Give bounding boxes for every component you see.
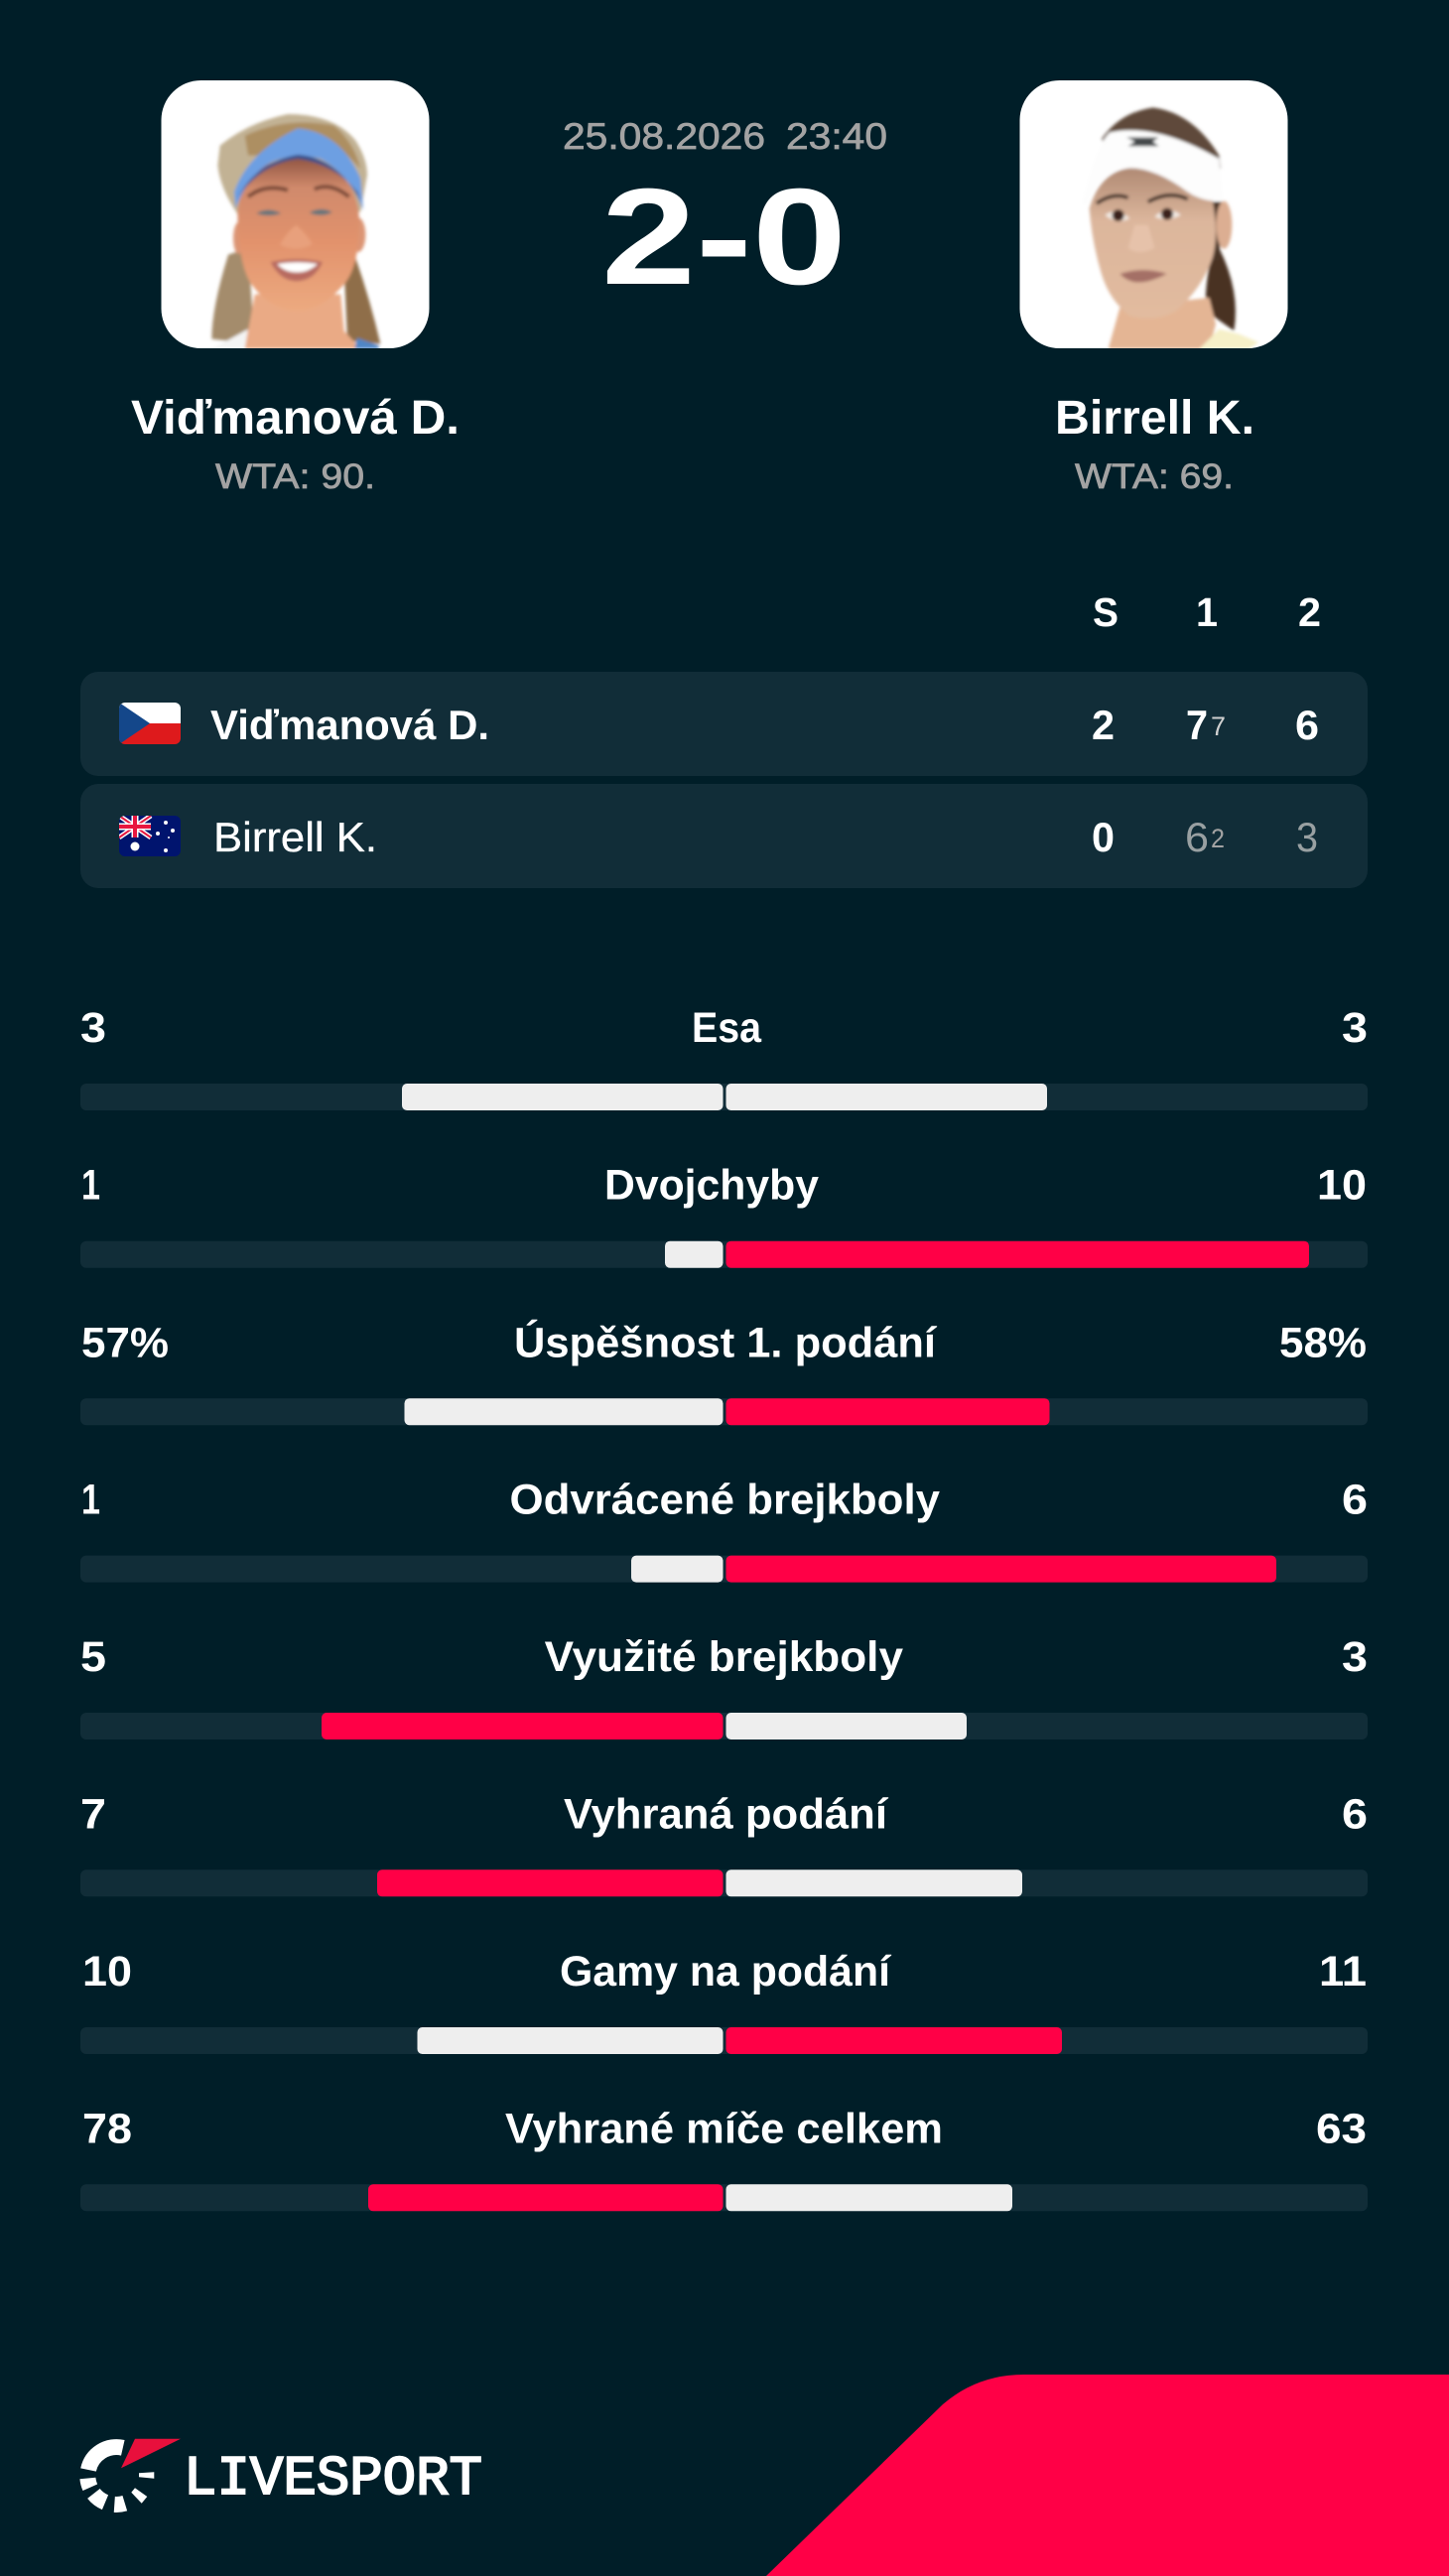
score row: Birrell: 0 (1092, 814, 1115, 860)
stat: Odvrácené brejkboly: 1 (81, 1477, 100, 1524)
stat: Vyhrané míče celkem: 63 (1316, 2106, 1367, 2153)
player name: Birrell: Birrell K. (1055, 392, 1254, 445)
score row: Birrell: 2 (1211, 824, 1225, 853)
stat: Vyhrané míče celkem: 78 (82, 2106, 132, 2153)
stat: Gamy na podání: Gamy na podání (560, 1948, 892, 1996)
stat: Gamy na podání: 10 (82, 1948, 132, 1996)
score row: Viďmanová (80, 672, 1368, 776)
stat: Esa: Esa (692, 1004, 762, 1052)
stat: Využité brejkboly (80, 1633, 1368, 1739)
stat: Odvrácené brejkboly (80, 1477, 1368, 1583)
stat: Vyhraná podání: Vyhraná podání (564, 1791, 889, 1839)
player ranking: Viďmanová: WTA: 90. (215, 457, 375, 496)
stat: Dvojchyby: Dvojchyby (604, 1162, 819, 1210)
icon: speedometer mark (87, 2439, 181, 2505)
score table header: S (1093, 589, 1119, 635)
icon: Australian flag (119, 816, 181, 856)
stat: Vyhrané míče celkem (80, 2106, 1368, 2211)
score row: Birrell (80, 784, 1368, 888)
score row: Birrell: Birrell K. (213, 814, 377, 860)
player photo: Birrell (1019, 80, 1287, 349)
score row: Viďmanová: 7 (1186, 702, 1208, 748)
score row: Viďmanová: Viďmanová D. (210, 702, 489, 748)
score table header (1093, 589, 1321, 635)
stat: Využité brejkboly: 5 (80, 1633, 106, 1681)
score table header: 1 (1196, 589, 1218, 635)
stat: Úspěšnost 1. podání: 57% (81, 1319, 169, 1366)
score row: Viďmanová: 7 (1211, 711, 1226, 741)
stat: Vyhraná podání (80, 1791, 1368, 1896)
corner accent shape (766, 2375, 1449, 2576)
stat: Dvojchyby: 10 (1317, 1162, 1367, 1210)
score row: Birrell: 3 (1296, 814, 1318, 860)
final score: 2-0 (601, 161, 847, 314)
stat: Esa: 3 (1342, 1004, 1368, 1052)
stat: Vyhraná podání: 6 (1342, 1791, 1368, 1839)
stat: Gamy na podání: 11 (1319, 1948, 1367, 1996)
stat: Úspěšnost 1. podání: Úspěšnost 1. podání (514, 1318, 938, 1366)
match date and time: 23:40 (786, 116, 887, 157)
stat: Esa: 3 (80, 1004, 106, 1052)
score row: Viďmanová: 6 (1295, 702, 1319, 748)
stat: Vyhrané míče celkem: Vyhrané míče celkem (505, 2106, 943, 2153)
icon: Czech flag (119, 703, 181, 744)
match date and time: 25.08.2026 (563, 116, 765, 157)
player photo: Viďmanová (161, 80, 429, 349)
match date and time (563, 116, 887, 157)
stat: Dvojchyby: 1 (81, 1162, 100, 1210)
stat: Odvrácené brejkboly: 6 (1342, 1477, 1368, 1524)
stat: Využité brejkboly: Využité brejkboly (545, 1633, 903, 1681)
stat: Využité brejkboly: 3 (1342, 1633, 1368, 1681)
stat: Úspěšnost 1. podání: 58% (1279, 1319, 1367, 1366)
player ranking: Birrell: WTA: 69. (1075, 457, 1234, 496)
score table header: 2 (1298, 589, 1321, 635)
stat: Vyhraná podání: 7 (80, 1791, 106, 1839)
stat: Úspěšnost 1. podání (80, 1318, 1368, 1425)
stat: Odvrácené brejkboly: Odvrácené brejkboly (510, 1477, 940, 1524)
stat: Dvojchyby (80, 1162, 1368, 1268)
stat: Esa (80, 1004, 1368, 1110)
Livesport logo (87, 2439, 482, 2511)
wordmark: LIVESPORT (184, 2447, 482, 2511)
score row: Birrell: 6 (1185, 814, 1209, 860)
player name: Viďmanová: Viďmanová D. (131, 392, 460, 445)
score row: Viďmanová: 2 (1092, 702, 1115, 748)
stat: Gamy na podání (80, 1948, 1368, 2054)
